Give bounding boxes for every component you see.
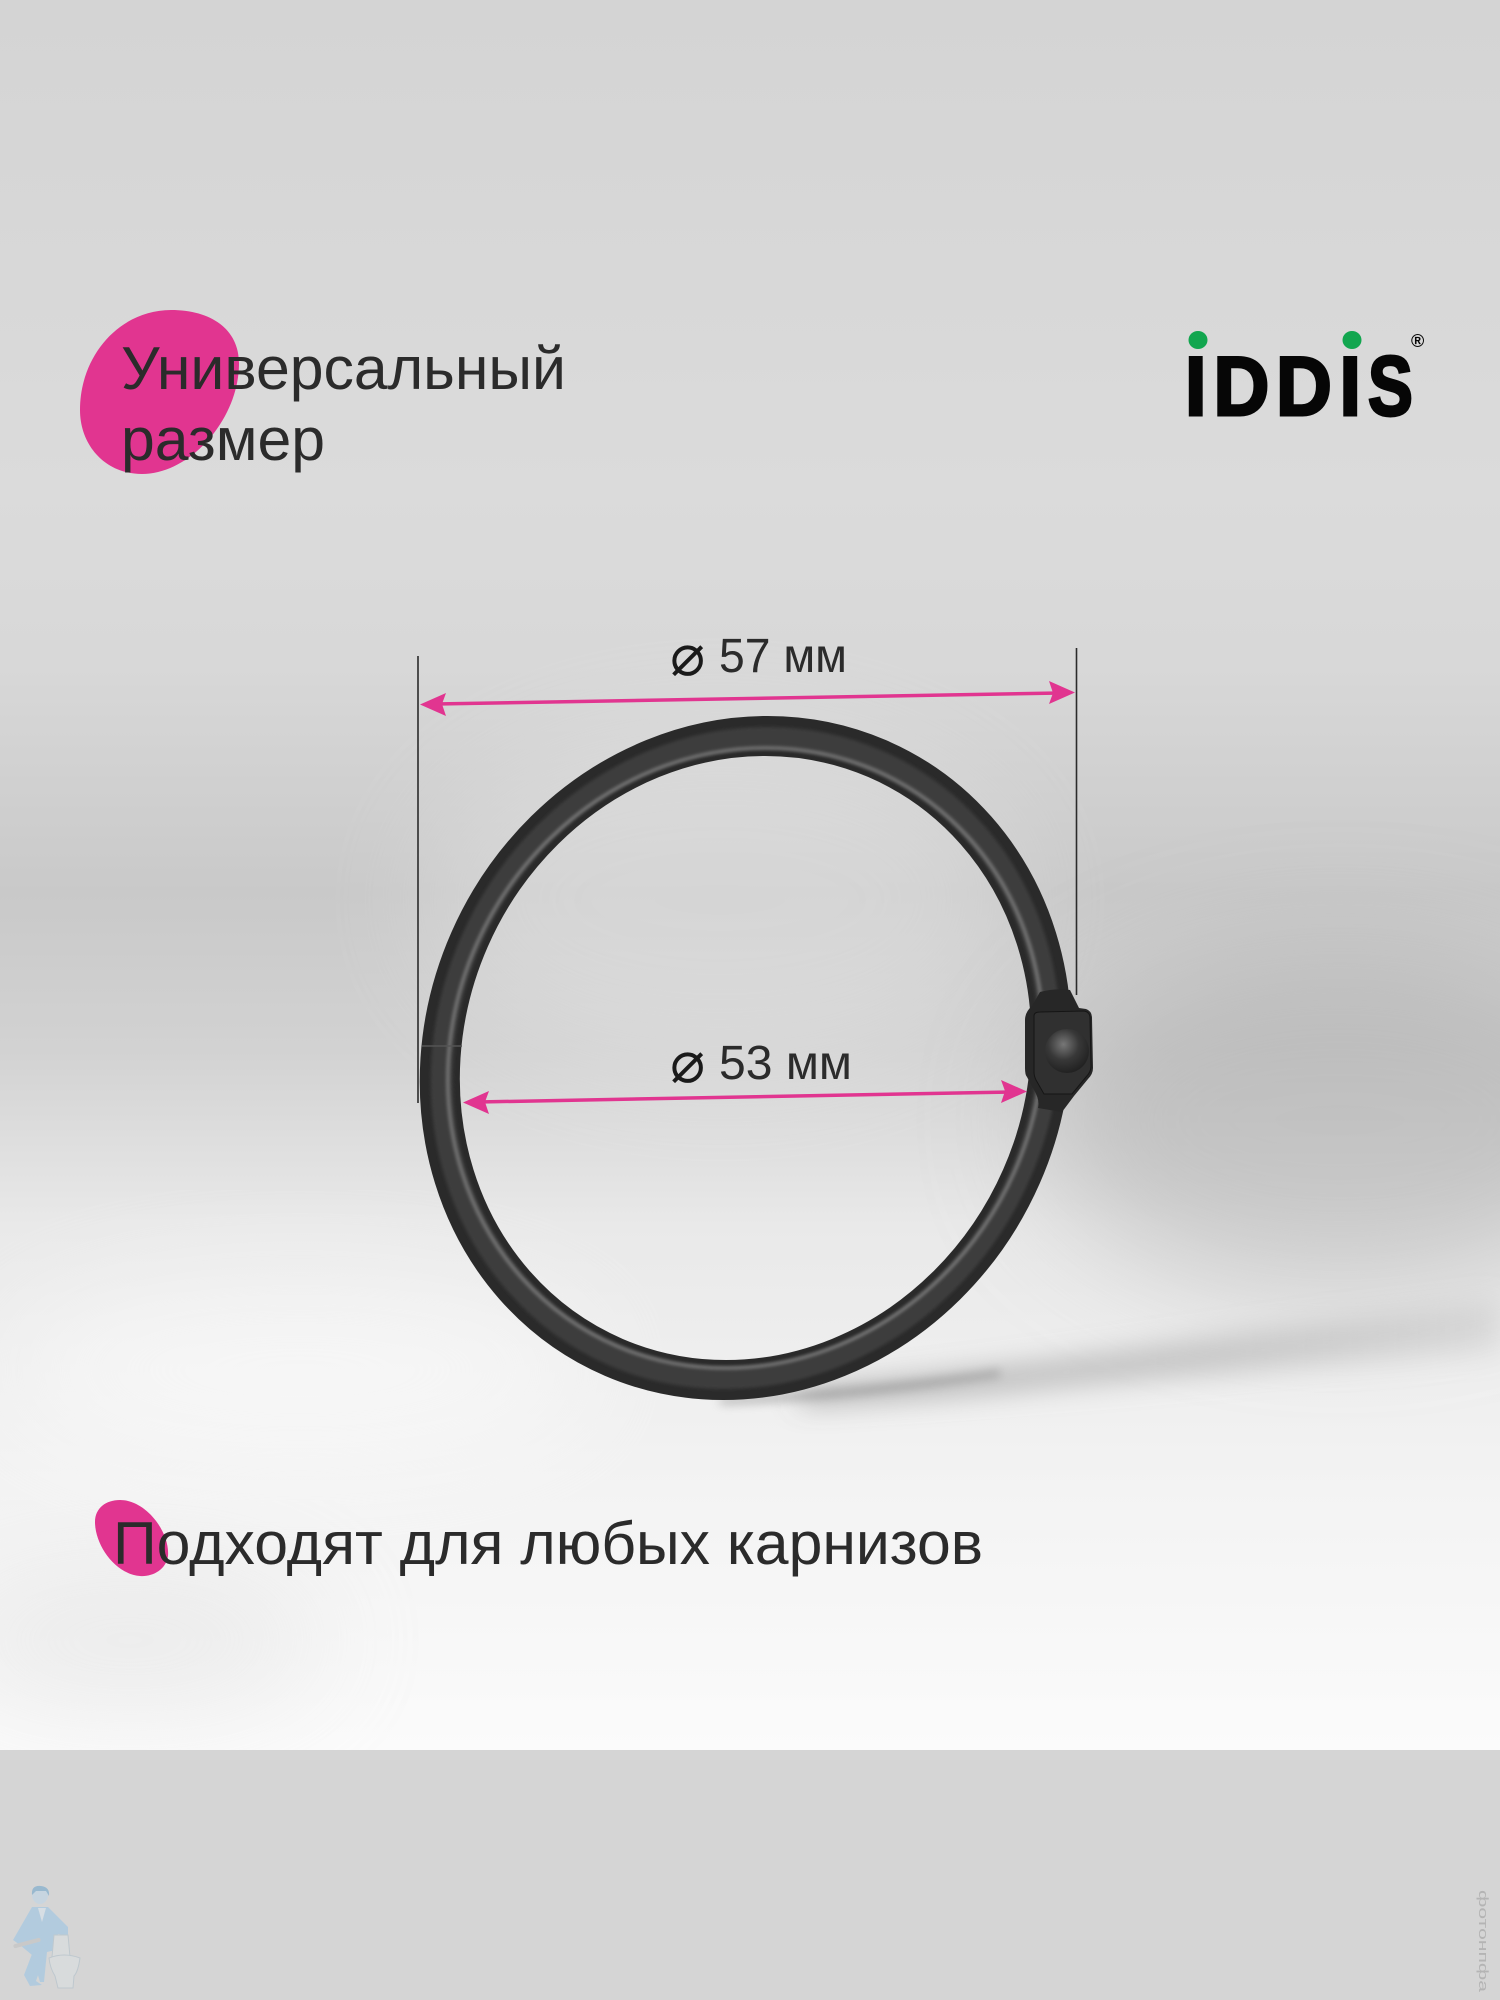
inner diameter label: 53 мм [719,1037,852,1090]
inner diameter label: ⌀ [670,1028,705,1096]
dimension: inner diameter 53 mm [463,1028,1027,1114]
ring clasp [1025,989,1093,1112]
IDDIS logo [1185,331,1424,434]
pink blob behind heading [80,310,239,474]
outer diameter arrow [420,681,1075,716]
dimension: outer diameter 57 mm [420,621,1075,716]
logo wordmark: S [1368,340,1413,434]
logo wordmark: IDDI [1185,340,1361,434]
black shower curtain ring [420,736,1093,1380]
bottom grey band [0,1750,1500,2000]
icon: plumber watermark [13,1886,80,1988]
heading: universal size: Универсальный [121,335,566,402]
outer diameter label: 57 мм [719,630,847,683]
inner diameter arrow [463,1080,1027,1114]
extension line right [1076,648,1078,995]
plumber figure [13,1886,68,1986]
small pink blob [95,1500,168,1576]
logo green dots [1188,331,1362,349]
ring body [420,736,1071,1380]
second feature: pink blob and caption [95,1500,983,1577]
outer diameter label: ⌀ [670,621,705,689]
heading: universal size: размер [121,406,325,473]
ring left seam [422,1045,462,1047]
toilet [49,1935,80,1988]
first feature: pink blob and heading [80,310,566,474]
caption: fits any rod: Подходят для любых карнизов [113,1510,983,1577]
background: studio photo backdrop [0,820,1500,1750]
ring cast shadow [720,1300,1500,1404]
vertical watermark text: фотонпфа [1476,1890,1491,1993]
extension line left [417,656,419,1103]
registered mark: ® [1411,331,1424,351]
